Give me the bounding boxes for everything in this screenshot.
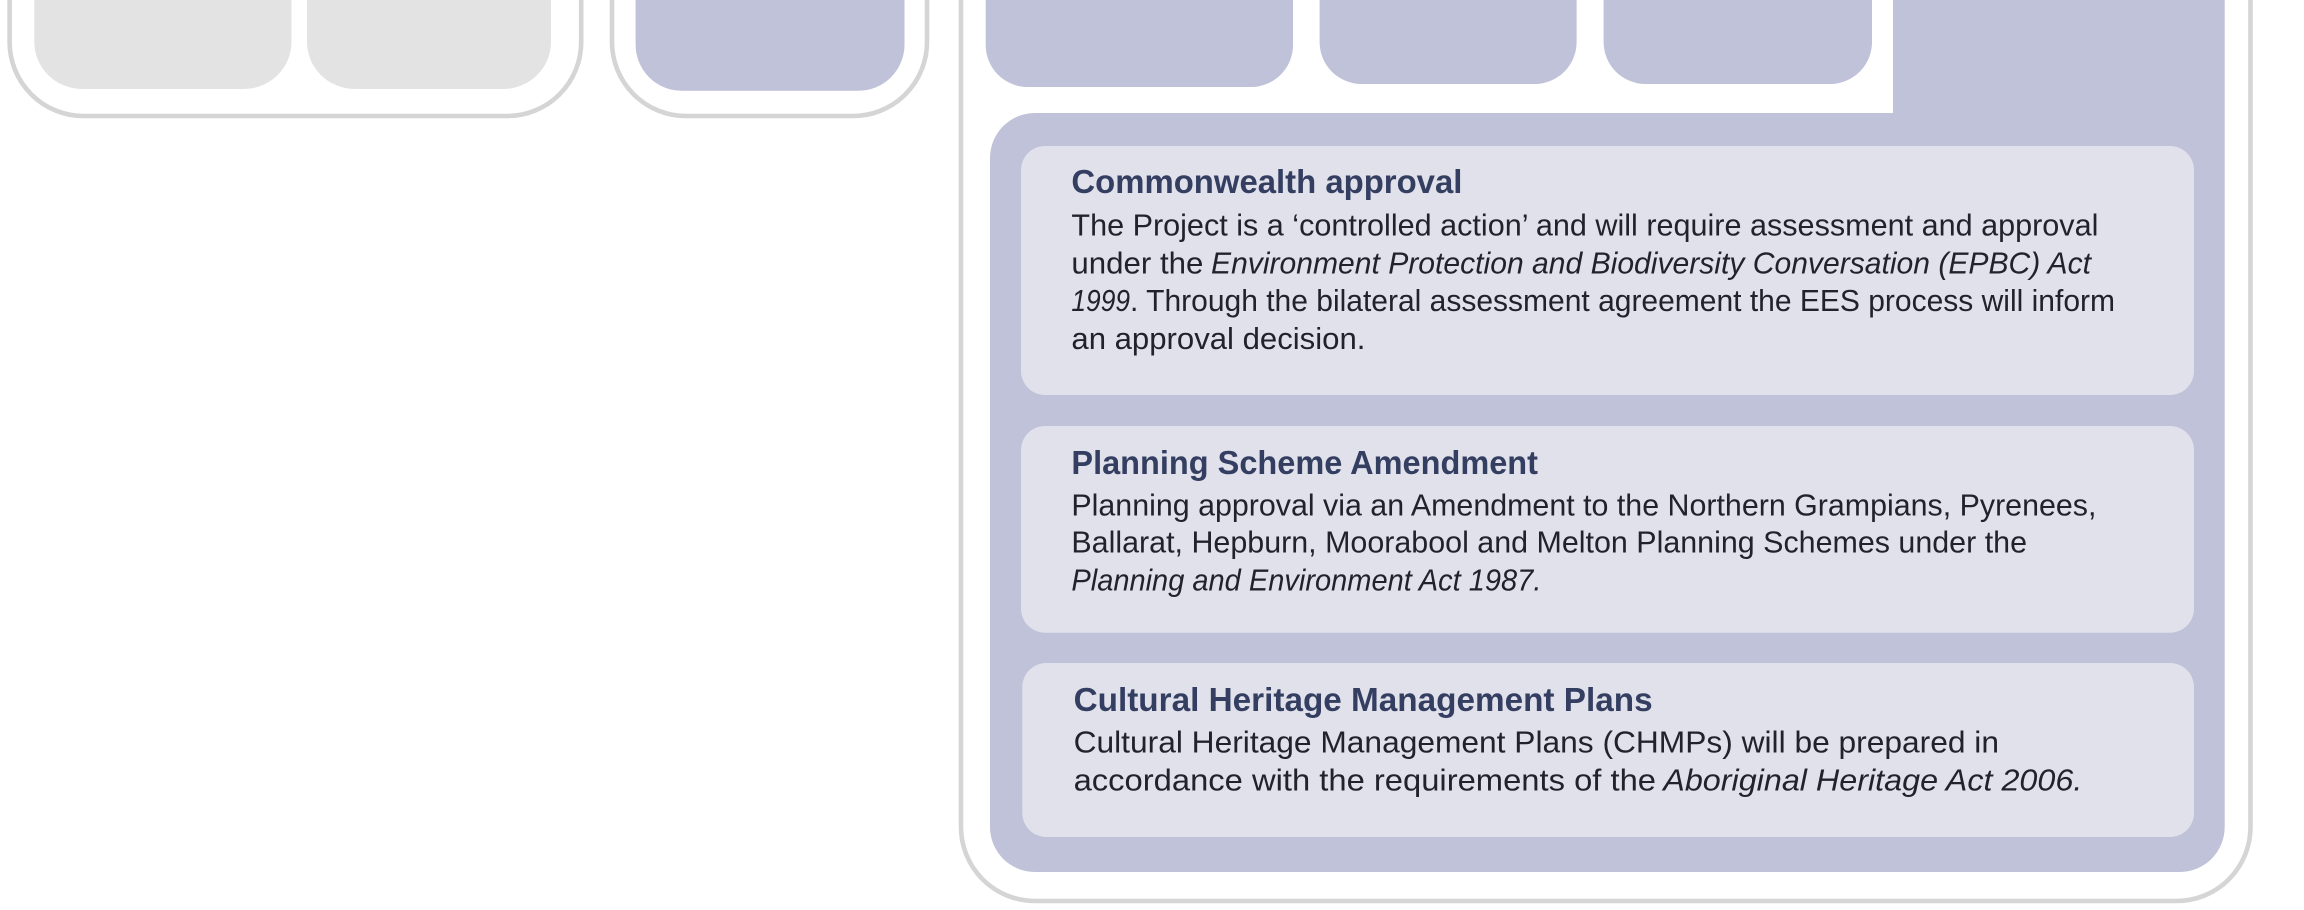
text: Commonwealth approval description: . Through the bilateral assessment agreement the EES process will inform (1130, 284, 2115, 318)
text: Commonwealth approval description: The Project is a ‘controlled action’ and will require assessment and approval (1071, 209, 2098, 243)
text: Cultural Heritage Management Plans description: Cultural Heritage Management Plans (CHMPs) will be prepared in (1074, 725, 1999, 759)
heading: Commonwealth approval: Commonwealth approval (1071, 163, 1462, 200)
text: Cultural Heritage Management Plans description (1074, 725, 2082, 798)
text: Planning Scheme Amendment description: Ballarat, Hepburn, Moorabool and Melton Planning Schemes under the (1071, 526, 2027, 560)
text: Commonwealth approval description: 1999 (1071, 284, 1130, 318)
text: Cultural Heritage Management Plans description: Aboriginal Heritage Act 2006. (1661, 764, 2082, 798)
card: Planning Scheme Amendment (1021, 426, 2194, 633)
text: Planning Scheme Amendment description: Planning and Environment Act 1987. (1071, 564, 1541, 598)
text: Commonwealth approval description (1071, 209, 2115, 356)
panel: right group outline (961, 0, 2250, 901)
box: blue top box 2 (1320, 0, 1577, 84)
box: blue top box 3 (1604, 0, 1872, 84)
box: blue box (636, 0, 904, 91)
panel: left grey group outline (10, 0, 581, 116)
card: Commonwealth approval (1021, 146, 2194, 395)
text: Commonwealth approval description: under the (1071, 246, 1203, 280)
text: Cultural Heritage Management Plans description: accordance with the requirements of the (1074, 764, 1656, 798)
heading: Cultural Heritage Management Plans: Cultural Heritage Management Plans (1074, 681, 1653, 718)
text: Planning Scheme Amendment description: Planning approval via an Amendment to the Northern Grampians, Pyrenees, (1071, 489, 2096, 523)
box: grey box 2 (307, 0, 551, 89)
panel: middle group outline (612, 0, 927, 116)
heading: Planning Scheme Amendment: Planning Scheme Amendment (1071, 444, 1538, 481)
card: Cultural Heritage Management Plans (1022, 663, 2194, 837)
text: Commonwealth approval description: an approval decision. (1071, 322, 1365, 356)
text: Planning Scheme Amendment description (1071, 489, 2096, 598)
box: blue top box 1 (986, 0, 1293, 87)
text: Commonwealth approval description: Environment Protection and Biodiversity Conversation (EPBC) Act (1211, 246, 2093, 280)
box: grey box 1 (34, 0, 292, 89)
panel: approvals background (990, 0, 2225, 872)
